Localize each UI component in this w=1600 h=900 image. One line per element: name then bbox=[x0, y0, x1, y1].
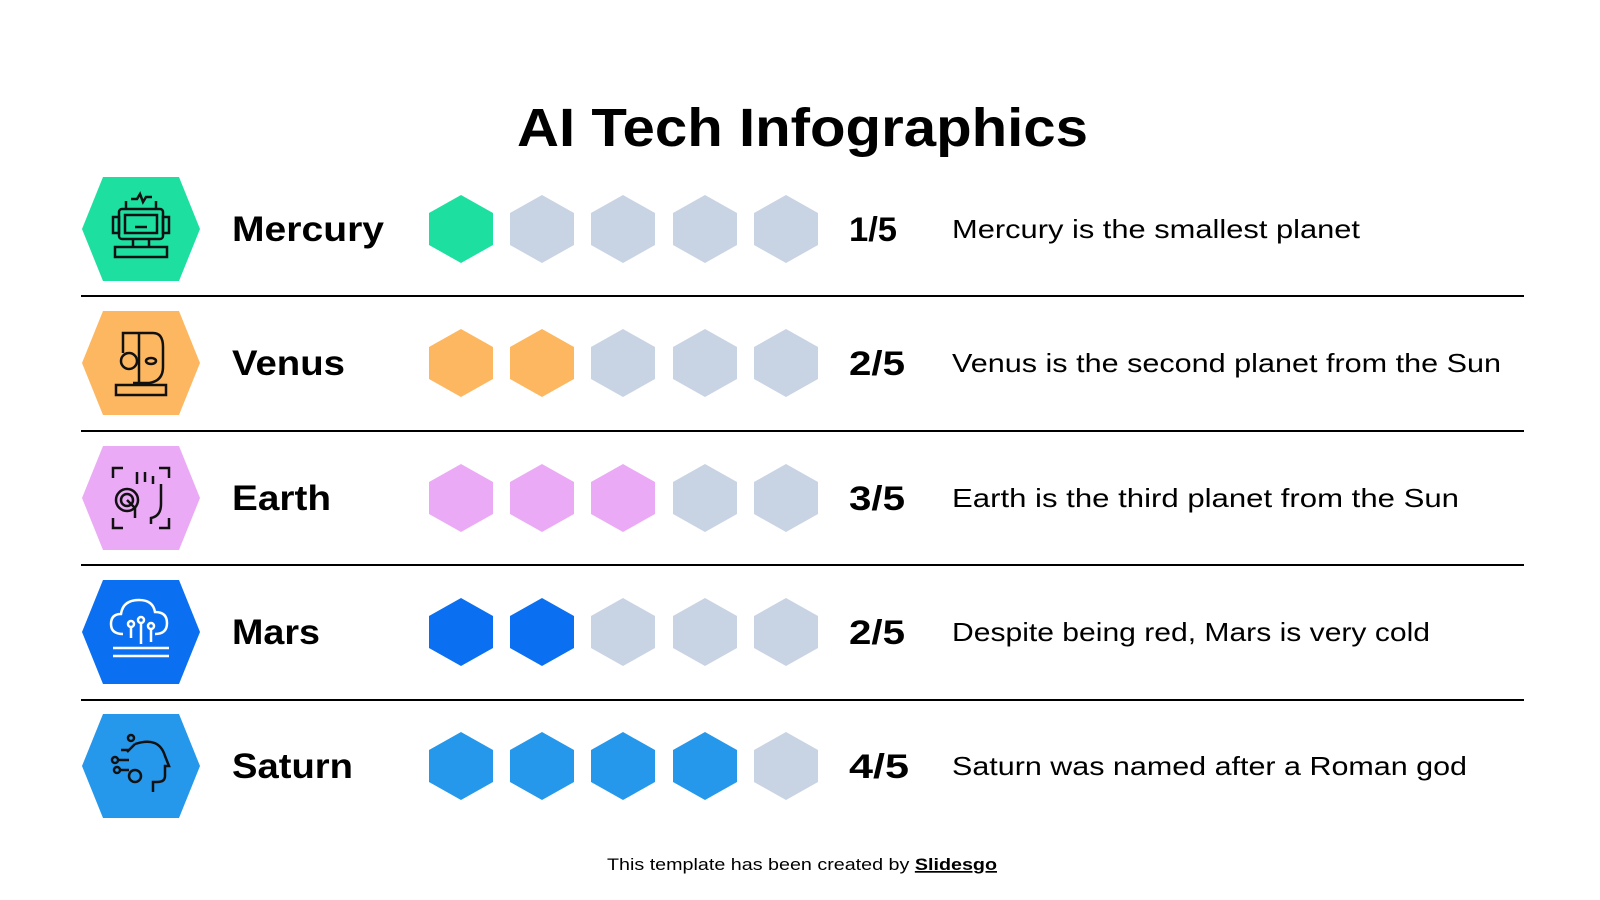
row: Mercury bbox=[82, 177, 1361, 281]
label: Saturn bbox=[232, 747, 353, 786]
rating hexes bbox=[429, 195, 818, 263]
rating hexes bbox=[429, 329, 818, 397]
title: AI Tech Infographics bbox=[517, 98, 1088, 158]
description: Venus is the second planet from the Sun bbox=[952, 348, 1501, 378]
label: Earth bbox=[232, 479, 331, 518]
description: Saturn was named after a Roman god bbox=[952, 751, 1467, 781]
icon: cyborg face bbox=[82, 311, 200, 415]
icon: AI head bbox=[82, 714, 200, 818]
rating hexes bbox=[429, 464, 818, 532]
row: Venus bbox=[82, 311, 1501, 415]
icon: cloud circuit bbox=[82, 580, 200, 684]
icon: robot bbox=[82, 177, 200, 281]
description: Earth is the third planet from the Sun bbox=[952, 483, 1459, 513]
row: Earth bbox=[82, 446, 1459, 550]
score: 2/5 bbox=[849, 345, 905, 383]
footer credit: This template has been created by Slidesgo bbox=[607, 855, 997, 874]
description: Mercury is the smallest planet bbox=[952, 214, 1361, 244]
rating hexes bbox=[429, 732, 818, 800]
label: Mars bbox=[232, 613, 320, 652]
label: Mercury bbox=[232, 210, 385, 249]
description: Despite being red, Mars is very cold bbox=[952, 617, 1430, 647]
rating hexes bbox=[429, 598, 818, 666]
score: 2/5 bbox=[849, 614, 905, 652]
score: 1/5 bbox=[849, 211, 897, 249]
row: Mars bbox=[82, 580, 1430, 684]
score: 3/5 bbox=[849, 480, 905, 518]
icon: touch hand bbox=[82, 446, 200, 550]
label: Venus bbox=[232, 344, 345, 383]
score: 4/5 bbox=[849, 748, 909, 786]
row: Saturn bbox=[82, 714, 1467, 818]
